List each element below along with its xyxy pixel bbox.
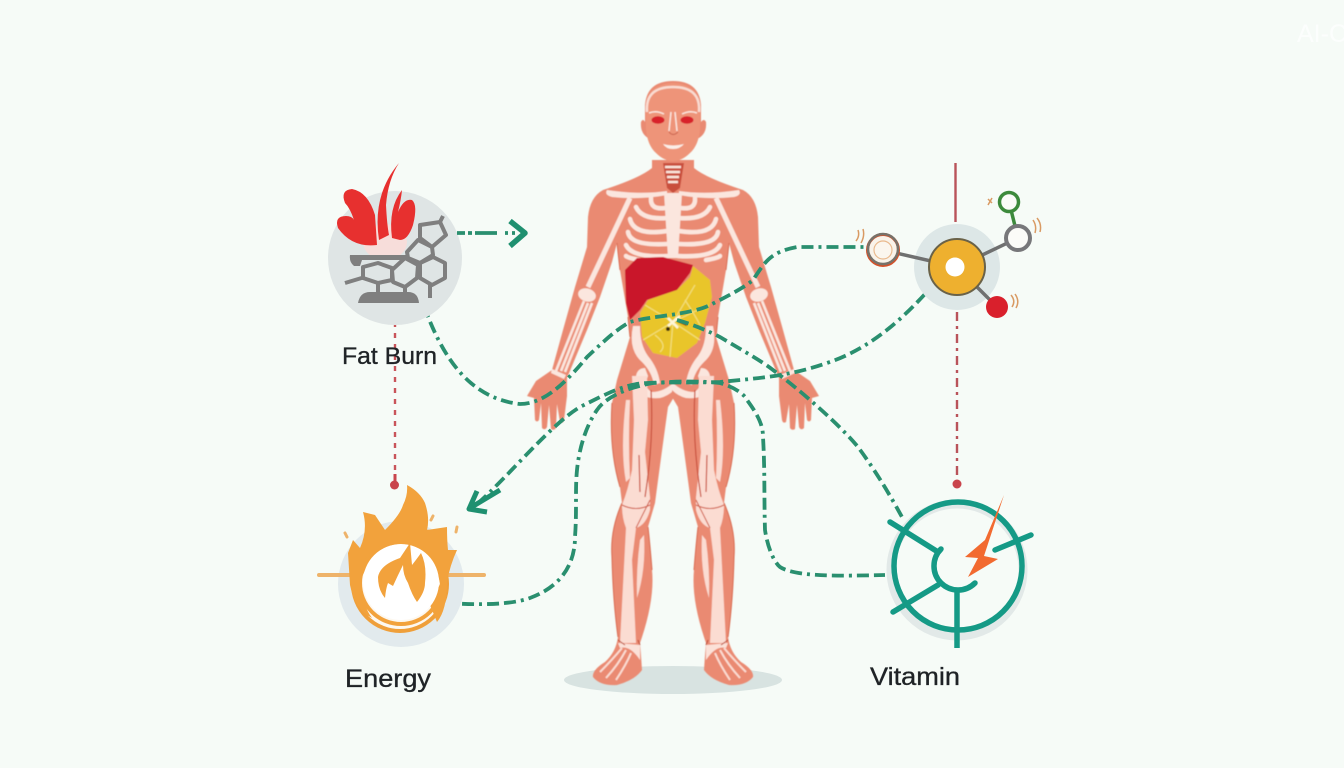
orange flame — [348, 485, 457, 622]
left half of body with skeleton — [527, 160, 674, 685]
red flame — [337, 163, 415, 245]
icon background circle — [328, 191, 462, 325]
teal wheel — [890, 502, 1031, 648]
liver — [625, 257, 693, 320]
sparks — [345, 516, 457, 537]
vitamin node — [870, 495, 1031, 691]
red connector: fat burn to energy — [394, 322, 396, 474]
pathway: fat burn to molecule — [424, 247, 868, 404]
yellow digestive organ — [640, 266, 712, 358]
human body figure — [527, 81, 819, 685]
eyes — [652, 116, 664, 124]
arrow: fat burn output — [457, 221, 525, 246]
red connector: molecule to vitamin — [952, 163, 962, 488]
mouth — [663, 144, 684, 149]
upper right atom — [1006, 226, 1030, 250]
lightning bolt — [965, 495, 1004, 577]
fat molecule hexagons — [345, 216, 446, 298]
icon background circle — [338, 521, 464, 647]
pathway: energy to vitamin — [445, 382, 885, 604]
molecule node — [856, 192, 1041, 318]
inner white ring with flame — [360, 528, 442, 624]
icon background circle — [891, 504, 1023, 636]
right half of body with skeleton — [672, 160, 819, 685]
trachea — [663, 163, 684, 193]
arrow head: to energy — [469, 490, 500, 512]
outer ring — [353, 537, 447, 631]
left atom — [868, 234, 898, 266]
label: energy: Energy — [345, 665, 432, 693]
fat burn node — [328, 163, 525, 370]
pale glow — [363, 224, 407, 260]
red atom — [986, 296, 1008, 318]
pathway: molecule to energy arrow — [476, 294, 925, 505]
pathway: organ to vitamin — [677, 320, 902, 517]
energy node — [319, 474, 484, 693]
label: fat burn: Fat Burn — [342, 343, 437, 370]
central atom — [929, 239, 985, 295]
head — [641, 81, 706, 161]
vibration marks — [856, 198, 1041, 308]
thermometer dot — [390, 474, 399, 490]
side bars — [319, 573, 484, 577]
molecule bonds — [883, 238, 1018, 307]
ground shadow — [564, 666, 782, 694]
label: vitamin: Vitamin — [870, 663, 960, 691]
fat molecule top bar and base — [350, 255, 419, 303]
green dashed pathways — [424, 247, 925, 604]
green atom — [1000, 192, 1018, 212]
nose — [669, 132, 678, 134]
icon background circle — [914, 224, 1000, 310]
